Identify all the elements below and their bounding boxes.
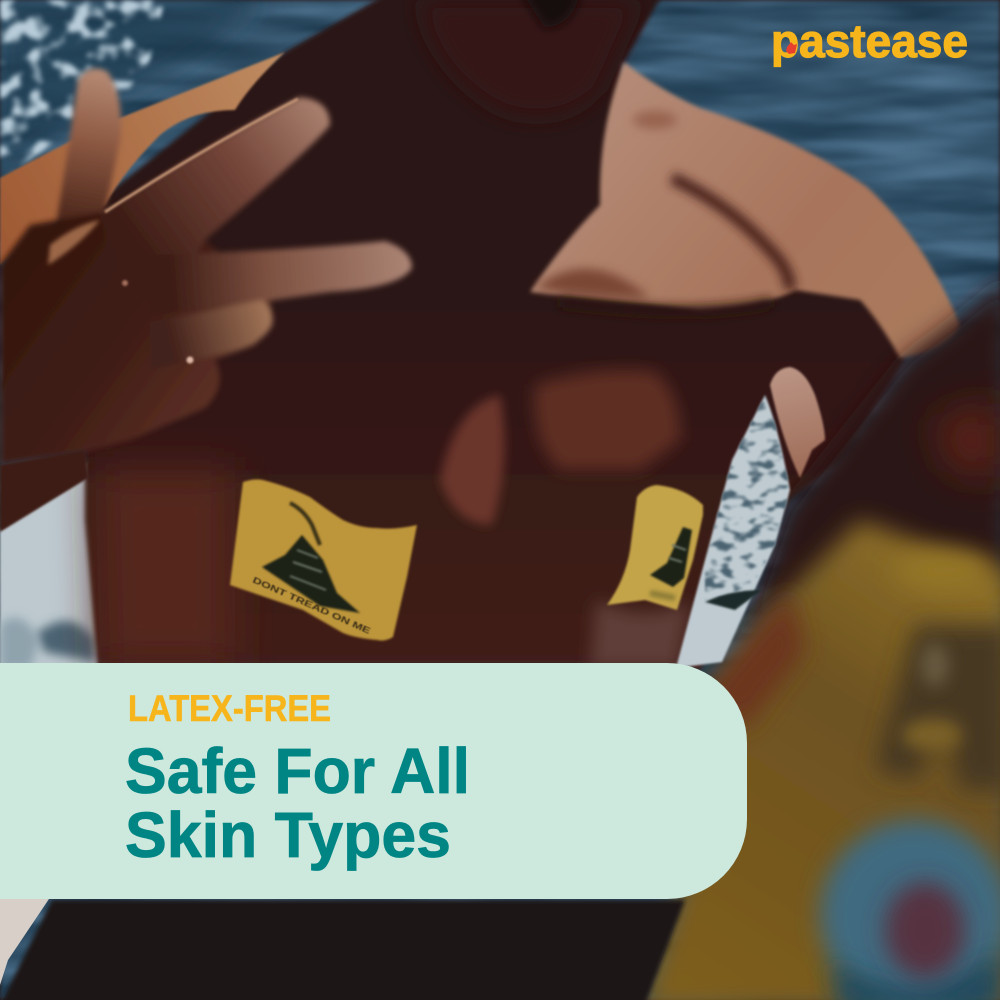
heading: Safe For All Skin Types: Safe For All <box>125 735 470 807</box>
thumb <box>770 367 825 478</box>
finger: third <box>150 241 412 315</box>
palm <box>0 212 273 465</box>
sticker: right flag <box>607 485 703 610</box>
blurred person: round badge <box>820 820 1000 1000</box>
blurred person: yellow jersey <box>640 520 1000 1000</box>
right shoulder and arm <box>530 62 960 358</box>
snake <box>262 535 360 613</box>
blurred person: dark hair <box>740 275 1000 640</box>
foam lower middle <box>676 395 790 668</box>
forearm below hand <box>0 450 88 532</box>
finger highlights <box>48 99 298 364</box>
finger: fourth <box>150 300 273 370</box>
black shorts <box>0 900 685 1000</box>
eyebrow: LATEX-FREE: LATEX-FREE <box>128 688 331 729</box>
left shoulder <box>0 52 285 265</box>
torso <box>85 0 905 670</box>
sticker: left flag <box>230 479 417 641</box>
foam lower left <box>0 460 100 670</box>
heading: Safe For All Skin Types <box>125 735 470 871</box>
pale strip bottom left <box>0 890 55 985</box>
logo: pastease: pastease <box>771 15 968 67</box>
raised hand <box>0 68 412 465</box>
finger: second <box>100 97 330 265</box>
heading: Safe For All Skin Types: Skin Types <box>125 799 451 871</box>
finger: upright <box>55 68 121 230</box>
icon: red maple leaf <box>786 42 797 54</box>
sticker motto: DONT TREAD ON ME <box>251 575 373 636</box>
top-left foam speckle <box>0 0 260 180</box>
